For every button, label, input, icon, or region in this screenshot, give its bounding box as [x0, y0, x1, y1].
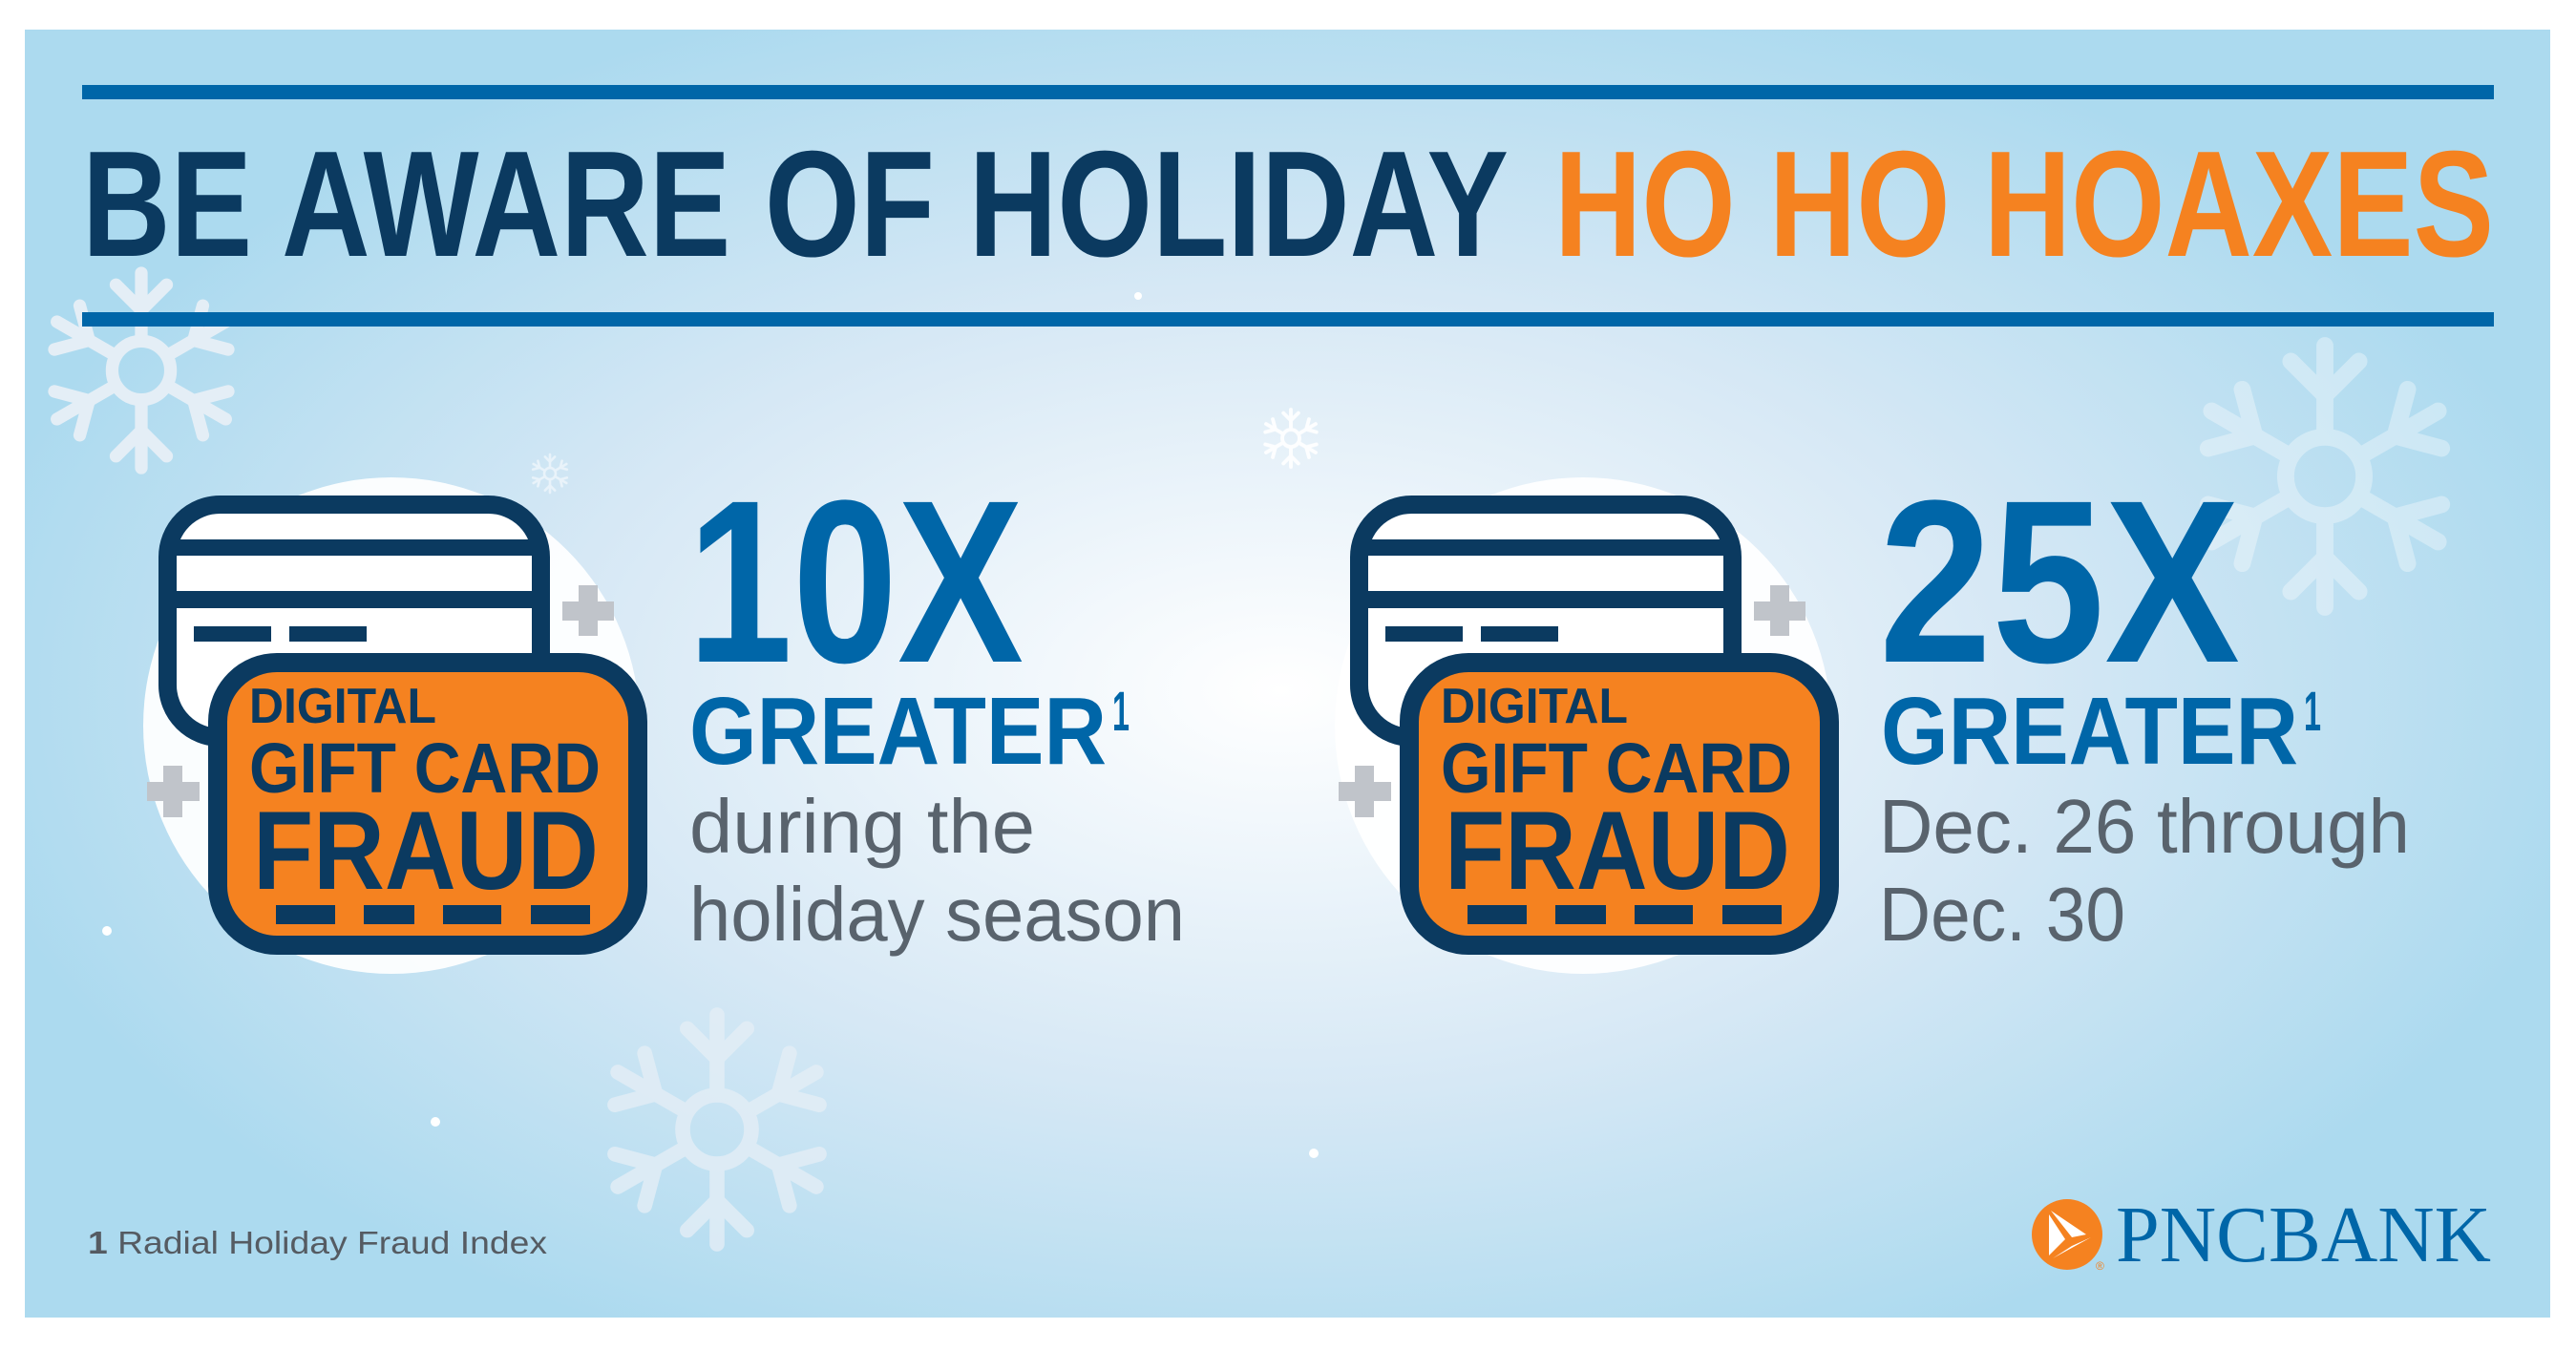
snowflake right: [2195, 346, 2455, 607]
stat text 1: GREATER: [689, 678, 1107, 785]
small snowflakes: [531, 410, 1320, 493]
icon: gift card: FRAUD: [253, 788, 599, 913]
icon: gift card 2: [1335, 477, 1831, 974]
stat text 1: during the: [689, 784, 1035, 869]
stat text 2: 1: [2304, 681, 2321, 743]
footnote: 1 Radial Holiday Fraud Index: [88, 1225, 548, 1260]
snowflake top-left: [44, 273, 239, 468]
stat text 2: Dec. 30: [1879, 872, 2125, 957]
stat text 2: GREATER: [1881, 678, 2298, 785]
stat text 2: 25X: [1879, 453, 2240, 711]
header lines: [82, 85, 2494, 327]
panel: stat 2: [1335, 453, 2410, 974]
icon: gift card: [143, 477, 640, 974]
stat text 2: Dec. 26 through: [1879, 784, 2410, 869]
stat text 1: holiday season: [689, 872, 1185, 957]
stat text 1: 1: [1112, 681, 1130, 743]
panel: stat 1: [143, 453, 1185, 974]
logo: PNC Bank: ®: [2096, 1259, 2104, 1273]
stat text 1: [687, 453, 1185, 957]
icon: gift card 2: FRAUD: [1445, 788, 1790, 913]
stat text 2: [1879, 453, 2410, 957]
logo: PNC Bank: PNCBANK: [2116, 1191, 2491, 1279]
title: BE AWARE OF HOLIDAY: [82, 120, 1509, 288]
icon: gift card: GIFT CARD: [249, 728, 601, 808]
dots: [102, 292, 1319, 1158]
icon: gift card 2: GIFT CARD: [1441, 728, 1792, 808]
snowflake bottom: [602, 1015, 832, 1244]
stat text 1: 10X: [687, 453, 1024, 711]
icon: gift card: DIGITAL: [249, 679, 436, 734]
icon: gift card 2: DIGITAL: [1441, 679, 1628, 734]
